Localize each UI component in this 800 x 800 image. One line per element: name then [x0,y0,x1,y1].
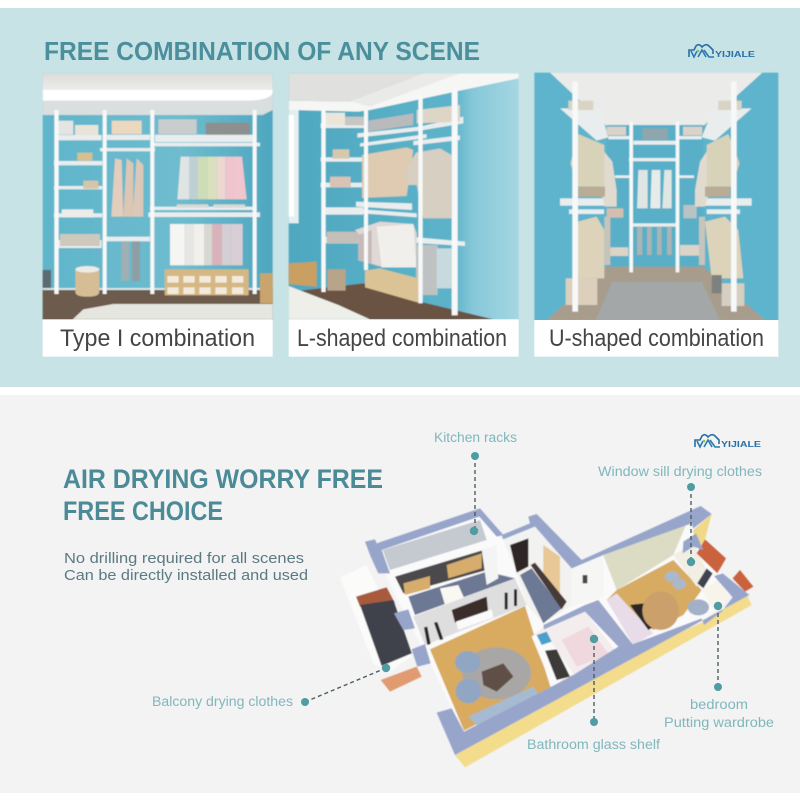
callout: bedroom putting wardrobe: Putting wardrobe [664,715,774,730]
panel: air drying worry free [0,395,800,793]
shelves [54,135,260,248]
callout: bedroom putting wardrobe [664,602,774,730]
callout: window sill drying clothes: Window sill drying clothes [598,464,762,479]
folded items [75,125,98,135]
floor boxes [566,278,597,305]
callout: balcony drying clothes: Balcony drying clothes [152,694,293,709]
partition [543,600,633,647]
heading: free combination: FREE COMBINATION OF ANY SCENE [44,38,480,66]
trousers [416,245,438,295]
basket [327,269,346,291]
folded items [325,113,345,125]
caption box [534,320,778,357]
shelves [321,117,465,246]
callout: balcony drying clothes [152,664,390,709]
panel: free combination of any scene [0,8,800,387]
folded items [568,101,593,110]
hanging coats [111,158,123,217]
living room floor [430,606,551,731]
living room tv wall [413,578,527,645]
poles [321,87,458,315]
entry white block [572,555,603,607]
kitchen [383,520,487,570]
yellow outer walls [455,596,752,767]
entry hall [503,527,573,623]
text block: no drilling [64,550,308,584]
heading: air drying: FREE CHOICE [63,496,223,526]
callout: kitchen racks: Kitchen racks [434,430,517,445]
card: type I combination [43,73,273,357]
floor plan illustration [340,506,753,767]
lavender walls [365,506,749,755]
middle garments [637,170,648,208]
shoe rack [165,269,249,295]
heading: air drying: AIR DRYING WORRY FREE [63,464,383,494]
basket [75,270,99,297]
hanging shirts [170,224,185,265]
poles [572,82,737,312]
caption box [289,319,519,357]
hanging shirts [355,222,417,267]
shelves [560,108,752,227]
caption box [43,319,273,357]
card: L-shaped combination [289,73,519,357]
callout: bathroom glass shelf: Bathroom glass shelf [527,737,660,752]
brick terraces [697,539,726,573]
shoe rack [365,268,418,303]
card: U-shaped combination [534,73,778,357]
callout: kitchen racks [434,430,517,535]
text block: no drilling: Can be directly installed and used [64,567,308,584]
callout: bathroom glass shelf [527,635,660,752]
callout: window sill drying clothes [598,464,762,566]
callout: bedroom putting wardrobe: bedroom [690,697,748,712]
bedroom [603,523,687,590]
hanging coats [599,147,617,207]
text block: no drilling: No drilling required for all scenes [64,550,304,567]
sofa [468,687,540,725]
table [482,663,513,692]
trousers [121,241,129,281]
heading: air drying [63,464,383,526]
hanging coats [362,147,413,198]
bathroom [532,612,617,685]
caption: type I: Type I combination [60,325,255,352]
white interior base [380,513,733,732]
caption: U-shaped: U-shaped combination [549,325,764,352]
poufs [455,651,480,673]
logo: yijiale top [689,45,755,59]
balcony [340,565,412,672]
rug [462,647,531,699]
logo: yijiale bottom [695,435,761,449]
poles [54,110,257,294]
hanging dresses [177,157,189,199]
caption: L-shaped: L-shaped combination [297,325,507,352]
